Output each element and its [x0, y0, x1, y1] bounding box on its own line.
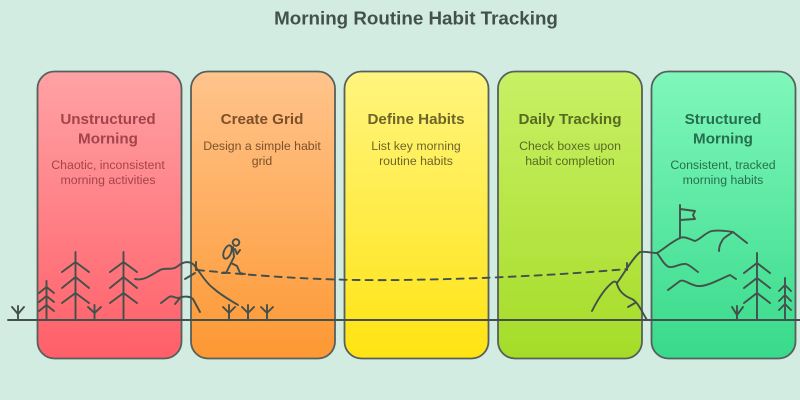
ground line: [8, 319, 800, 321]
text: define habits description: routine habits: [379, 154, 453, 168]
heading: define habits: Define Habits: [367, 111, 465, 128]
panel: structured morning: [652, 72, 796, 358]
heading: structured morning: Morning: [693, 130, 753, 148]
heading: daily tracking: Daily Tracking: [519, 111, 621, 128]
icon: summit flag: [680, 205, 695, 238]
text: structured description: morning habits: [683, 173, 763, 187]
heading: create grid: Create Grid: [221, 111, 303, 128]
icon: starting hills: [135, 262, 273, 320]
text: unstructured description: Chaotic, inconsistent: [51, 158, 165, 172]
panel: unstructured morning: [38, 72, 182, 358]
heading: structured morning: Structured: [685, 111, 761, 128]
panel: define habits: [344, 72, 488, 358]
text: daily tracking description: Check boxes upon: [519, 139, 621, 153]
heading: unstructured morning: Unstructured: [60, 111, 156, 128]
text: unstructured description: morning activities: [60, 173, 156, 187]
dashed trail: [197, 269, 627, 280]
panel: daily tracking: [498, 72, 642, 358]
text: create grid description: Design a simple habit: [203, 139, 321, 153]
icon: hiker: [222, 239, 245, 274]
heading: unstructured morning: Morning: [78, 130, 138, 148]
icon: left forest: [12, 252, 137, 320]
title: Morning Routine Habit Tracking: [274, 8, 558, 28]
icon: right forest: [732, 253, 791, 320]
text: daily tracking description: habit completion: [525, 154, 615, 168]
text: structured description: Consistent, tracked: [670, 158, 776, 172]
text: define habits description: List key morning: [371, 139, 461, 153]
panel: create grid: [191, 72, 335, 358]
text: create grid description: grid: [252, 154, 272, 168]
icon: summit mountains: [592, 231, 747, 320]
